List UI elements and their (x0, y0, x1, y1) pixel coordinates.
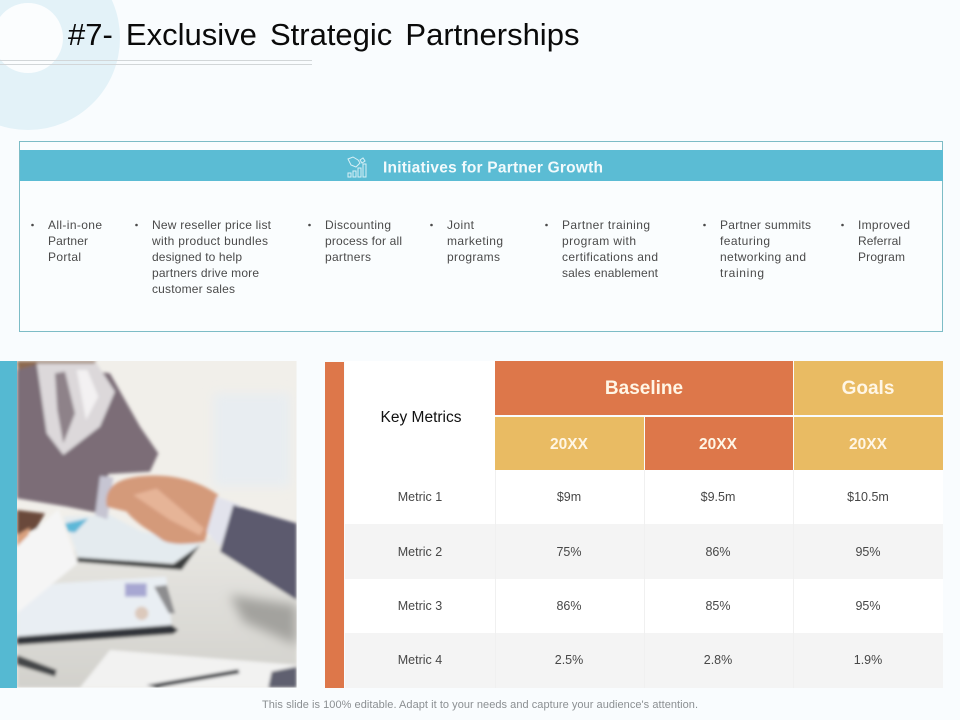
row: metric 4: Metric 4 (398, 653, 442, 667)
baseline year 1: 20XX (550, 436, 589, 453)
initiative 2 (135, 218, 272, 296)
title: #7- Exclusive Strategic Partnerships (68, 17, 579, 52)
baseline year 1 (495, 417, 644, 470)
row: metric 4: 2.8% (704, 653, 732, 667)
row: metric 3 (345, 579, 943, 633)
baseline year 2 (645, 417, 793, 470)
initiative 6: Partner summits (720, 218, 811, 232)
row: metric 3: 95% (855, 599, 881, 613)
initiative 6 (703, 218, 811, 280)
row: metric 1: $9.5m (701, 490, 735, 504)
initiative 5 (545, 218, 659, 280)
initiative 7: Program (858, 250, 905, 264)
initiative 5: program with (562, 234, 636, 248)
panel heading: Initiatives for Partner Growth (383, 160, 603, 176)
footer note: This slide is 100% editable. Adapt it to your needs and capture your audience's attention. (262, 699, 698, 711)
row: metric 1 (345, 470, 943, 524)
row: metric 3: 86% (556, 599, 582, 613)
baseline header: Baseline (605, 378, 683, 399)
panel: initiatives for partner growth (20, 142, 943, 332)
goals year (794, 417, 943, 470)
row: metric 2: 86% (705, 545, 731, 559)
row: metric 3: Metric 3 (398, 599, 442, 613)
icon: growth chart with handshake (348, 157, 366, 177)
initiative 6: networking and (720, 250, 806, 264)
goals year: 20XX (849, 436, 888, 453)
row: metric 1: $10.5m (847, 490, 889, 504)
initiative 2: with product bundles (151, 234, 268, 248)
initiative 4: Joint (447, 218, 475, 232)
panel header band (20, 150, 943, 181)
orange accent bar (325, 362, 344, 688)
initiative 5: sales enablement (562, 266, 659, 280)
initiative 5: Partner training (562, 218, 650, 232)
initiative 5: certifications and (562, 250, 658, 264)
baseline header (495, 361, 793, 415)
initiative 1: All-in-one (48, 218, 102, 232)
initiative 3 (308, 218, 402, 264)
row: metric 4: 2.5% (555, 653, 583, 667)
key metrics header cell (345, 361, 495, 470)
initiative 2: customer sales (152, 282, 235, 296)
row: metric 2: 95% (855, 545, 881, 559)
initiative 2: New reseller price list (152, 218, 272, 232)
row: metric 1: Metric 1 (398, 490, 442, 504)
baseline year 2: 20XX (699, 436, 738, 453)
initiative 1: Partner (48, 234, 88, 248)
row: metric 4 (345, 633, 943, 688)
initiative 6: featuring (720, 234, 770, 248)
initiative 2: designed to help (152, 250, 242, 264)
goals header: Goals (842, 378, 894, 399)
initiative 1 (31, 218, 102, 264)
initiative 7: Improved (858, 218, 910, 232)
photo: business handshake over documents (17, 361, 297, 688)
table: key metrics (345, 361, 943, 688)
initiative 3: Discounting (325, 218, 391, 232)
row: metric 2: Metric 2 (398, 545, 442, 559)
row: metric 2 (345, 524, 943, 579)
row: metric 4: 1.9% (854, 653, 882, 667)
decorative circle (0, 0, 120, 130)
row: metric 3: 85% (705, 599, 731, 613)
initiative 4 (430, 218, 503, 264)
goals header (794, 361, 943, 415)
initiative 2: partners drive more (152, 266, 259, 280)
initiative 3: process for all (325, 234, 402, 248)
key metrics header cell: Key Metrics (381, 409, 462, 426)
initiative 7 (841, 218, 910, 264)
teal accent bar (0, 361, 17, 688)
row: metric 1: $9m (557, 490, 581, 504)
title underline (0, 60, 312, 64)
initiative 6: training (720, 266, 764, 280)
initiative 4: programs (447, 250, 500, 264)
initiative 7: Referral (858, 234, 901, 248)
initiative 4: marketing (447, 234, 503, 248)
initiative 1: Portal (48, 250, 81, 264)
row: metric 2: 75% (556, 545, 582, 559)
initiative 3: partners (325, 250, 371, 264)
